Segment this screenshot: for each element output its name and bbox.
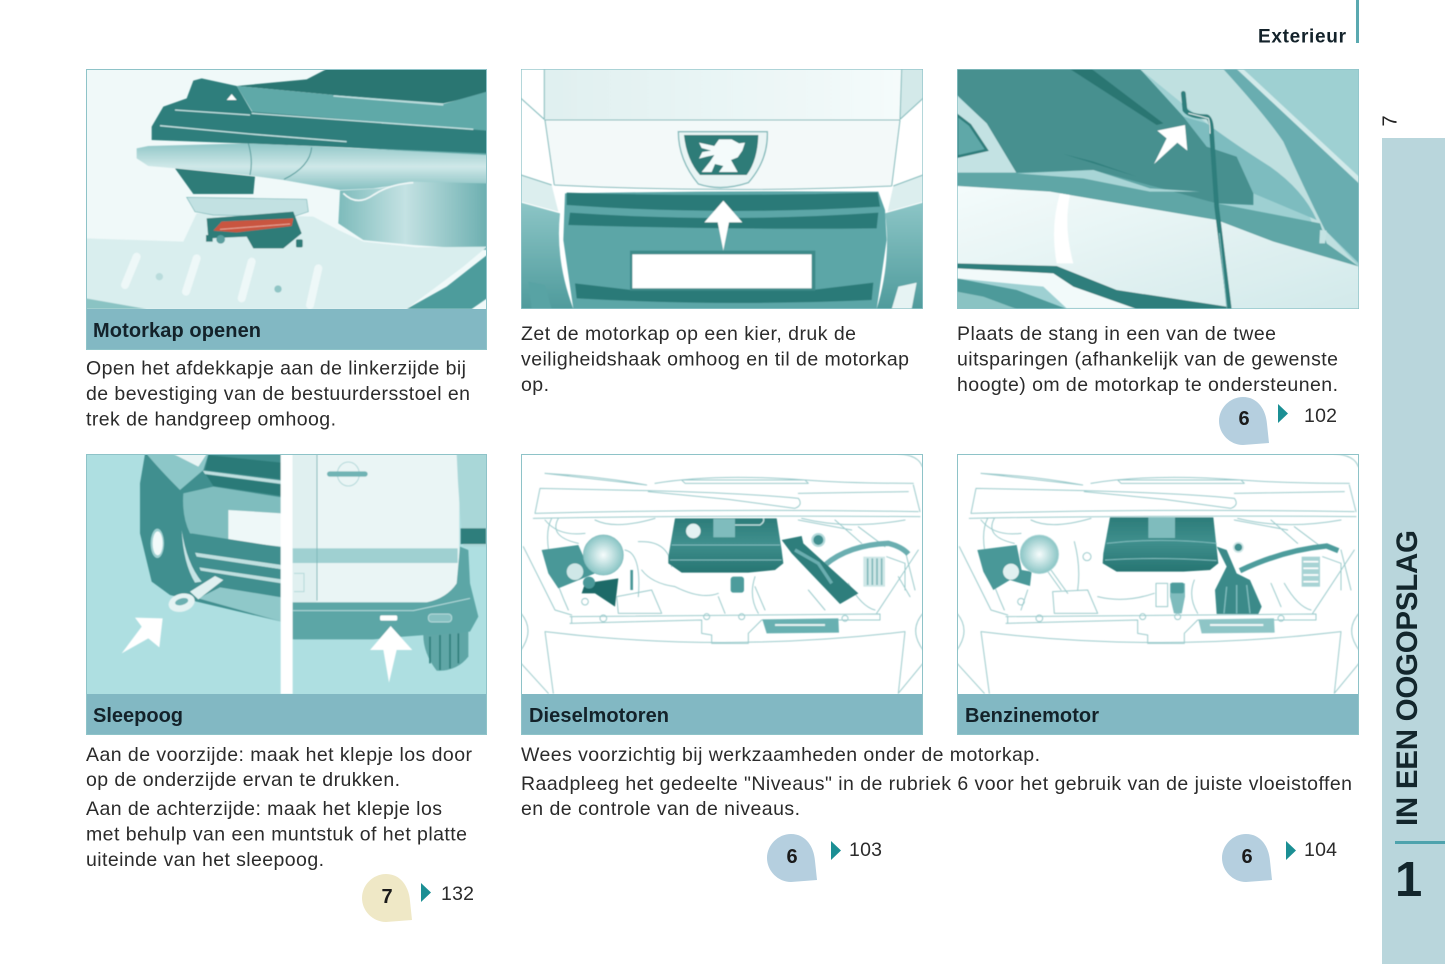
icon: towing eye <box>166 576 223 615</box>
text: werkzaamheden onder de motorkap: Raadpleeg het gedeelte "Niveaus" in de rubriek 6 voor het gebruik van de juiste vloeistoffen <box>521 773 1352 795</box>
engine cover <box>668 518 783 573</box>
caption bar <box>86 309 487 350</box>
arrow: to rod slot <box>1154 125 1187 164</box>
text: sleepoog instructies: Aan de voorzijde: maak het klepje los door <box>86 744 472 766</box>
caption bar: Sleepoog <box>93 705 183 727</box>
page number: 7 <box>1380 115 1402 126</box>
reference: rubriek 6 page 103: 103 <box>849 839 882 861</box>
text: kier en veiligheidshaak: Zet de motorkap op een kier, druk de <box>521 323 856 345</box>
header: section title Exterieur <box>1258 0 1359 48</box>
text: kier en veiligheidshaak <box>521 323 909 396</box>
text: open motorkap: Open het afdekkapje aan de linkerzijde bij <box>86 358 466 380</box>
arrow: up <box>704 201 742 251</box>
text: stang plaatsen: hoogte) om de motorkap te ondersteunen. <box>957 374 1338 396</box>
reference: rubriek 6 page 104 <box>1222 834 1337 882</box>
reservoir <box>542 545 595 588</box>
icon: Peugeot badge <box>678 132 767 188</box>
caption bar: Motorkap openen <box>93 320 261 342</box>
text: werkzaamheden onder de motorkap: Wees voorzichtig bij werkzaamheden onder de motorkap. <box>521 744 1040 766</box>
text: kier en veiligheidshaak: op. <box>521 374 549 396</box>
text: sleepoog instructies: uiteinde van het sleepoog. <box>86 849 324 871</box>
caption bar <box>957 694 1359 735</box>
reference: rubriek 7 page 132 <box>362 874 474 922</box>
text: open motorkap: trek de handgreep omhoog. <box>86 408 336 430</box>
reference: rubriek 6 page 102: 102 <box>1304 405 1337 427</box>
text: open motorkap <box>86 358 470 430</box>
text: sleepoog instructies: met behulp van een muntstuk of het platte <box>86 824 467 846</box>
illustration: hood release handle under driver seat <box>87 70 486 309</box>
reference: rubriek 6 page 103 <box>767 834 882 882</box>
illustration: petrol engine bay <box>958 455 1358 694</box>
caption bar: Benzinemotor <box>965 705 1099 727</box>
arrow: rear towing eye <box>370 626 412 683</box>
reference: rubriek 7 page 132: 132 <box>441 883 474 905</box>
header: section title Exterieur: Exterieur <box>1258 26 1347 48</box>
illustration: towing eye front and rear <box>87 455 486 694</box>
panel: Dieselmotoren <box>521 454 923 735</box>
reference: rubriek 6 page 103: 6 <box>786 846 798 868</box>
panel: Sleepoog <box>86 454 487 735</box>
panel: Motorkap openen <box>86 69 487 350</box>
oil filler pipe <box>825 543 908 565</box>
reference: rubriek 6 page 102: 6 <box>1238 408 1250 430</box>
text: werkzaamheden onder de motorkap: en de controle van de niveaus. <box>521 798 800 820</box>
reference: rubriek 7 page 132: 7 <box>381 886 393 908</box>
rod <box>1183 93 1229 309</box>
text: sleepoog instructies <box>86 744 472 871</box>
text: stang plaatsen: Plaats de stang in een van de twee <box>957 323 1276 345</box>
text: stang plaatsen <box>957 323 1338 396</box>
panel: Benzinemotor <box>957 454 1359 735</box>
caption bar: Dieselmotoren <box>529 705 669 727</box>
engine cover <box>1103 517 1218 572</box>
text: sleepoog instructies: op de onderzijde ervan te drukken. <box>86 769 400 791</box>
text: werkzaamheden onder de motorkap <box>521 744 1352 820</box>
air intake <box>1240 546 1338 571</box>
reference: rubriek 6 page 102 <box>1219 397 1337 445</box>
panel: grille and safety catch <box>521 69 923 309</box>
text: stang plaatsen: uitsparingen (afhankelijk van de gewenste <box>957 348 1338 370</box>
reservoir <box>977 545 1032 590</box>
illustration: diesel engine bay <box>522 455 922 694</box>
text: kier en veiligheidshaak: veiligheidshaak omhoog en til de motorkap <box>521 348 909 370</box>
side tab: chapter 1 IN EEN OOGOPSLAG: 1 <box>1395 853 1422 907</box>
caption bar <box>521 694 923 735</box>
reference: rubriek 6 page 104: 6 <box>1241 846 1253 868</box>
arrow: front towing eye <box>122 618 163 653</box>
side tab: chapter 1 IN EEN OOGOPSLAG <box>1382 138 1445 964</box>
text: sleepoog instructies: Aan de achterzijde: maak het klepje los <box>86 798 442 820</box>
caption bar <box>86 694 487 735</box>
reference: rubriek 6 page 104: 104 <box>1304 839 1337 861</box>
side tab: chapter 1 IN EEN OOGOPSLAG: IN EEN OOGOPSLAG <box>1391 530 1424 826</box>
panel: hood support rod <box>957 69 1359 309</box>
text: open motorkap: de bevestiging van de bestuurdersstoel en <box>86 383 470 405</box>
